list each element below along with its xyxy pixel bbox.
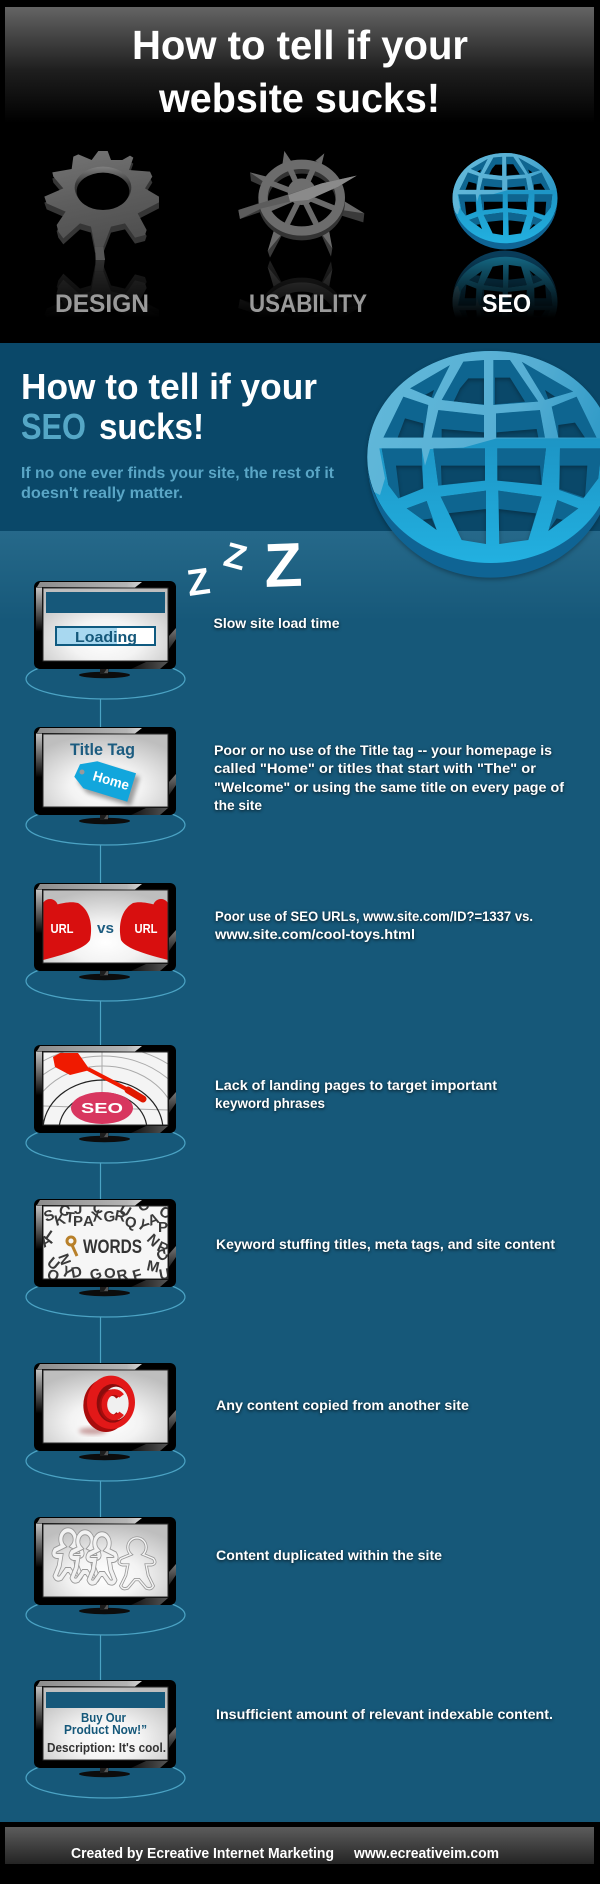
title: How to tell if your — [132, 22, 468, 68]
monitor 5: keyword words: T — [65, 1209, 75, 1227]
icon: design gear — [44, 151, 159, 260]
text: seo urls — [214, 909, 533, 942]
wheel reflection — [238, 260, 364, 310]
monitor 5: keyword words: N — [54, 1252, 74, 1268]
monitor 5: keyword words: C — [91, 1199, 105, 1218]
monitor 5: keyword words: Y — [58, 1263, 75, 1282]
monitor 5: keyword words: O — [45, 1266, 62, 1286]
label: seo: SEO — [482, 290, 531, 318]
text: title tag — [214, 743, 565, 813]
monitor 5: keyword words: U — [158, 1265, 171, 1284]
globe reflection — [452, 250, 558, 314]
text: landing pages — [215, 1078, 498, 1111]
monitor 8: thin content page: Buy Our — [81, 1711, 126, 1725]
monitor 5: keyword words: R — [115, 1266, 130, 1285]
monitor 5: keyword words: K — [53, 1211, 68, 1230]
text: title tag: "Welcome" or using the same title on every page of — [214, 780, 565, 795]
monitor 5: keyword words: M — [145, 1257, 161, 1277]
text: title tag: Poor or no use of the Title tag -- your homepage is — [214, 743, 552, 758]
text: landing pages: keyword phrases — [215, 1096, 325, 1111]
footer credits: Created by Ecreative Internet Marketing — [71, 1846, 334, 1862]
text: title tag: the site — [214, 798, 262, 813]
monitor 5: keyword words: G — [88, 1265, 104, 1285]
monitor 5: keyword words: O — [136, 1196, 153, 1216]
footer credits: www.ecreativeim.com — [353, 1846, 499, 1862]
monitor 5: keyword words: U — [43, 1254, 63, 1274]
label: usability: USABILITY — [249, 290, 367, 318]
monitor 5: keyword words: Y — [133, 1216, 152, 1236]
title — [132, 22, 468, 121]
text: seo urls: Poor use of SEO URLs, www.site.com/ID?=1337 vs. — [215, 909, 533, 924]
icon: sleeping z letters: Z — [263, 531, 303, 601]
monitor 1: loading: Loading — [75, 629, 137, 646]
monitor 5: keyword words: S — [42, 1206, 57, 1226]
monitor 5: keyword words: L — [42, 1227, 59, 1247]
icon: seo globe — [453, 153, 558, 249]
monitor 2: title tag — [26, 727, 185, 845]
monitor 8: thin content page: Description: It's cool. — [47, 1740, 166, 1755]
monitor 5: keyword words: A — [83, 1213, 94, 1230]
monitor 2: title tag: Title Tag — [70, 740, 135, 759]
heading: seo sucks — [21, 366, 317, 447]
footer panel — [5, 1827, 594, 1864]
text: copied content: Any content copied from another site — [216, 1398, 470, 1413]
title: website sucks! — [158, 75, 440, 121]
monitor 5: keyword words: Q — [123, 1213, 138, 1232]
monitor 5: keyword words: R — [154, 1238, 171, 1258]
monitor 5: keyword words: J — [74, 1201, 82, 1218]
monitor 5: keyword words: C — [156, 1203, 174, 1223]
intro text: If no one ever finds your site, the rest of it — [21, 465, 335, 482]
monitor 5: keyword words: P — [73, 1213, 83, 1230]
monitor 3: url versus: URL — [134, 921, 158, 936]
text: seo urls: www.site.com/cool-toys.html — [214, 927, 415, 942]
icon: sleeping z letters: Z — [184, 560, 213, 604]
heading: seo sucks: How to tell if your — [21, 366, 317, 407]
monitor 2: title tag: Home — [91, 768, 131, 793]
icon: sleeping z letters: Z — [220, 535, 251, 578]
top banner panel — [5, 7, 594, 123]
icon: sleeping z letters — [184, 531, 303, 604]
monitor 3: url versus: vs — [97, 920, 114, 937]
heading: seo sucks: sucks! — [99, 406, 204, 447]
intro text — [21, 465, 335, 502]
monitor 5: keyword words: N — [143, 1231, 163, 1250]
monitor 5: keyword words: F — [131, 1266, 144, 1285]
icon: large globe — [367, 351, 600, 578]
monitor 5: keyword words: O — [104, 1265, 116, 1282]
monitor 8: thin content page — [26, 1680, 185, 1798]
text: insufficient content: Insufficient amount of relevant indexable content. — [216, 1707, 553, 1722]
monitor 5: keyword words: P — [158, 1219, 168, 1236]
text: duplicated content: Content duplicated within the site — [216, 1548, 443, 1563]
monitor 8: thin content page: Product Now!” — [64, 1723, 147, 1737]
monitor 5: keyword words: U — [116, 1201, 134, 1221]
icon: usability wheel — [238, 151, 364, 258]
monitor 3: url versus: URL — [50, 921, 74, 936]
monitor 5: keyword words: A — [38, 1231, 56, 1251]
monitor 4: dart target — [25, 1045, 186, 1164]
connector lines — [100, 699, 102, 1680]
monitor 5: keyword words: C — [154, 1245, 172, 1265]
monitor 3: url versus — [26, 883, 185, 1001]
text: keyword stuffing: Keyword stuffing titles, meta tags, and site content — [216, 1237, 556, 1252]
text: landing pages: Lack of landing pages to target important — [215, 1078, 498, 1093]
monitor 5: keyword words: X — [90, 1207, 104, 1226]
monitor 5: keyword words: A — [146, 1210, 162, 1230]
panel: main list background — [0, 531, 600, 1822]
monitor 5: keyword words: C — [57, 1201, 72, 1221]
monitor 5: keyword words — [26, 1196, 185, 1317]
monitor 5: keyword words: R — [113, 1207, 127, 1226]
monitor 7: cookie cutters — [26, 1517, 185, 1635]
monitor 6: copyright symbol — [26, 1363, 185, 1481]
monitor 4: dart target: SEO — [81, 1100, 123, 1117]
text: title tag: called "Home" or titles that start with "The" or — [214, 761, 537, 776]
footer credits — [71, 1846, 499, 1862]
monitor 1: loading — [26, 581, 185, 699]
heading: seo sucks: SEO — [21, 406, 86, 447]
panel: seo header — [0, 343, 600, 531]
monitor 5: keyword words: G — [103, 1208, 116, 1226]
label: design: DESIGN — [55, 290, 149, 318]
monitor 5: keyword words: WORDS — [83, 1237, 142, 1258]
gear reflection — [56, 258, 146, 308]
text: slow load time: Slow site load time — [214, 616, 340, 631]
monitor 5: keyword words: D — [70, 1263, 84, 1282]
intro text: doesn't really matter. — [21, 485, 183, 502]
